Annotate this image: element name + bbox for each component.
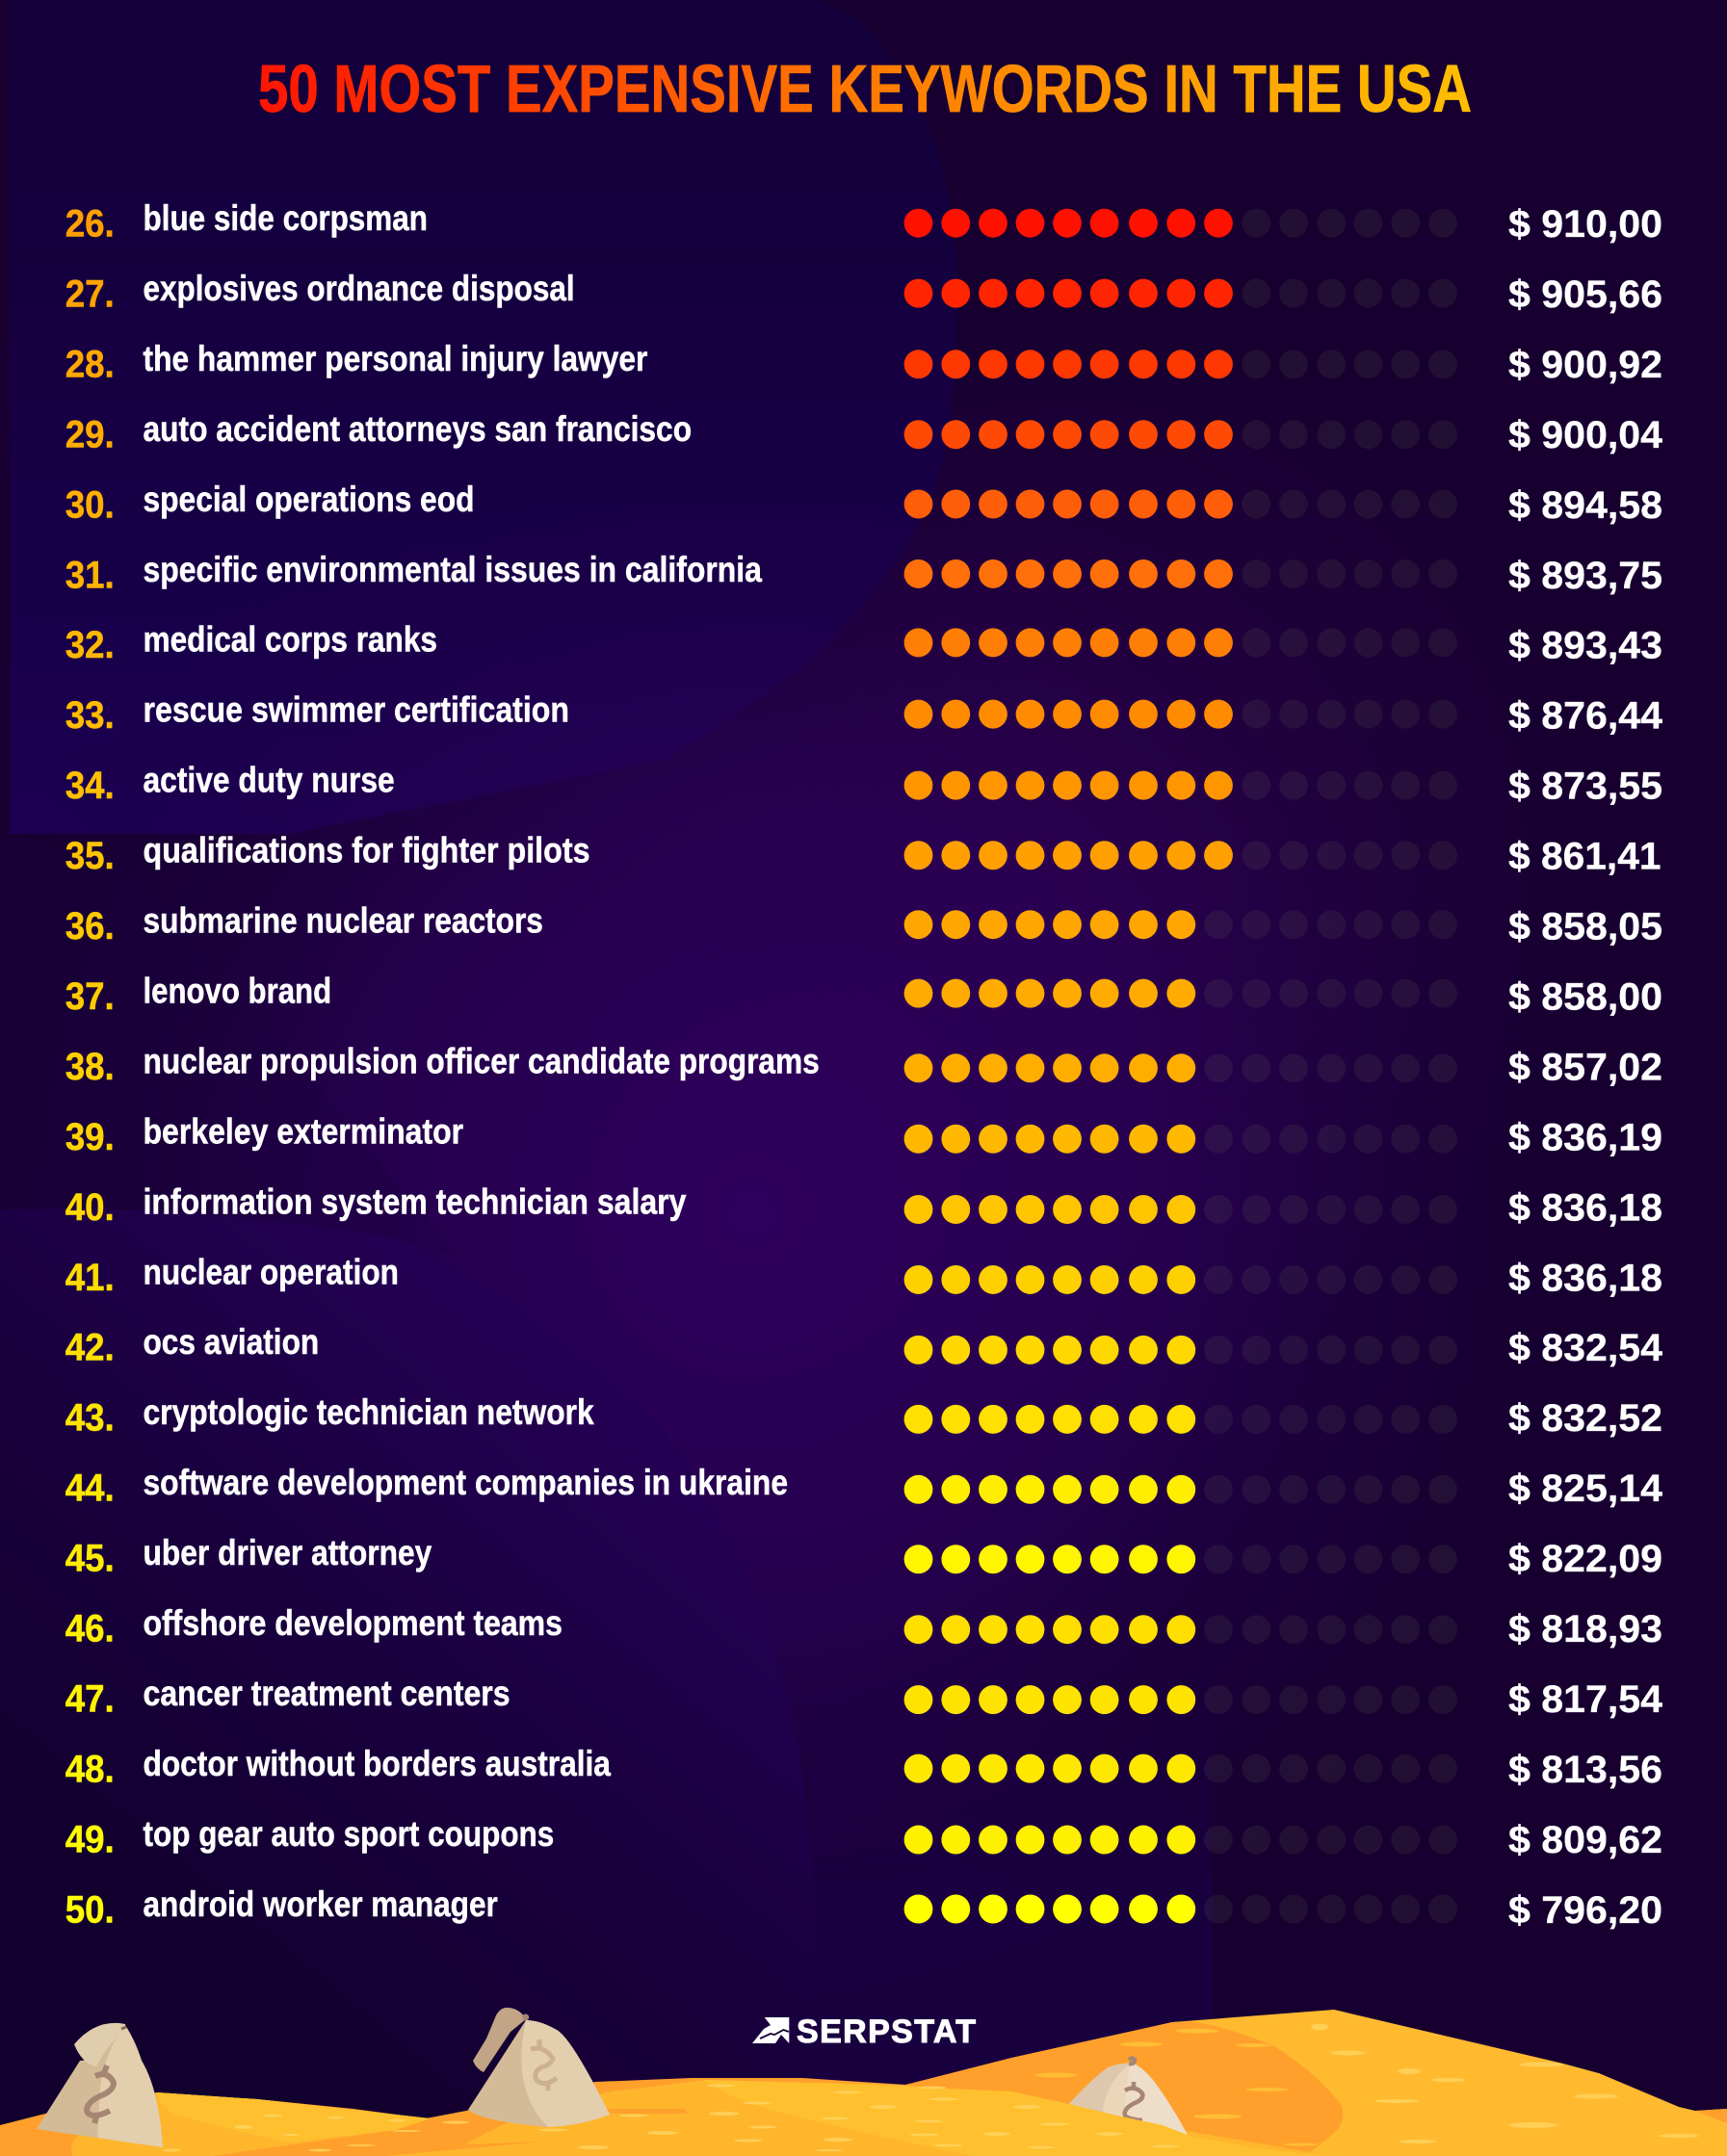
rank 44: 44. — [65, 1468, 115, 1510]
keyword 37: lenovo brand — [143, 970, 331, 1010]
keyword 50: android worker manager — [143, 1883, 498, 1924]
dots 50 — [904, 1895, 1457, 1924]
row 49 — [65, 1813, 1662, 1861]
row 31 — [65, 549, 1662, 597]
dots 31 — [904, 559, 1457, 588]
serpstat logo — [752, 2013, 976, 2050]
dots 37 — [904, 979, 1457, 1008]
dots 33 — [904, 700, 1457, 729]
money bag left — [37, 2023, 163, 2147]
rank 45: 45. — [65, 1538, 115, 1580]
keyword 26: blue side corpsman — [143, 197, 428, 238]
price 48: $ 813,56 — [1508, 1749, 1662, 1791]
rank 32: 32. — [65, 624, 115, 666]
bag 3 half buried — [1067, 2059, 1191, 2143]
keyword 46: offshore development teams — [143, 1602, 563, 1643]
money bag center — [468, 2008, 610, 2127]
keyword 36: submarine nuclear reactors — [143, 899, 543, 940]
rank 41: 41. — [65, 1257, 115, 1299]
row 34 — [65, 760, 1662, 808]
price 30: $ 894,58 — [1508, 484, 1662, 527]
keyword 45: uber driver attorney — [143, 1532, 432, 1572]
rank 50: 50. — [65, 1888, 115, 1931]
dots 28 — [904, 350, 1457, 378]
dots 26 — [904, 209, 1457, 238]
price 45: $ 822,09 — [1508, 1538, 1662, 1580]
keyword 42: ocs aviation — [143, 1321, 319, 1362]
keyword 34: active duty nurse — [143, 760, 395, 800]
row 46 — [65, 1602, 1662, 1650]
keyword 49: top gear auto sport coupons — [143, 1813, 554, 1854]
keyword 47: cancer treatment centers — [143, 1673, 510, 1713]
row 26 — [65, 197, 1662, 246]
rank 33: 33. — [65, 694, 115, 737]
row 29 — [65, 408, 1663, 456]
dots 36 — [904, 910, 1457, 939]
price 50: $ 796,20 — [1508, 1889, 1662, 1932]
orange hill shadow — [867, 2022, 1343, 2156]
keyword 28: the hammer personal injury lawyer — [143, 338, 648, 378]
logo wordmark: SERPSTAT — [797, 2013, 976, 2050]
price 35: $ 861,41 — [1508, 836, 1661, 878]
price 43: $ 832,52 — [1508, 1397, 1662, 1440]
dots 45 — [904, 1545, 1457, 1573]
keyword 41: nuclear operation — [143, 1251, 399, 1291]
row 39 — [65, 1110, 1662, 1158]
price 49: $ 809,62 — [1508, 1819, 1662, 1861]
dots 43 — [904, 1405, 1457, 1434]
dots 30 — [904, 489, 1457, 518]
keyword 33: rescue swimmer certification — [143, 689, 569, 730]
price 34: $ 873,55 — [1508, 766, 1662, 808]
dots 32 — [904, 628, 1457, 657]
rank 39: 39. — [65, 1116, 115, 1158]
center mid gold mound — [385, 2080, 1332, 2156]
dots 27 — [904, 279, 1457, 308]
price 31: $ 893,75 — [1508, 555, 1662, 597]
rank 29: 29. — [65, 413, 115, 455]
left light gold mound — [157, 2092, 431, 2143]
price 28: $ 900,92 — [1508, 344, 1662, 386]
row 33 — [65, 689, 1663, 738]
title: 50 MOST EXPENSIVE KEYWORDS IN THE USA — [258, 51, 1472, 126]
keyword 39: berkeley exterminator — [143, 1110, 463, 1151]
keyword ranking list — [65, 197, 1663, 1932]
dots 41 — [904, 1265, 1457, 1294]
price 41: $ 836,18 — [1508, 1257, 1662, 1299]
dots 35 — [904, 841, 1457, 870]
rank 34: 34. — [65, 765, 115, 807]
rank 38: 38. — [65, 1046, 115, 1088]
price 39: $ 836,19 — [1508, 1116, 1662, 1158]
rank 30: 30. — [65, 483, 115, 526]
price 27: $ 905,66 — [1508, 273, 1662, 316]
rank 35: 35. — [65, 835, 115, 877]
price 29: $ 900,04 — [1508, 414, 1663, 456]
orange bar — [607, 2109, 688, 2114]
dots 46 — [904, 1615, 1457, 1644]
rank 36: 36. — [65, 905, 115, 948]
row 44 — [65, 1462, 1663, 1510]
rank 40: 40. — [65, 1186, 115, 1229]
right edge orange sliver — [1695, 2109, 1727, 2123]
keyword 32: medical corps ranks — [143, 619, 437, 660]
row 42 — [65, 1321, 1663, 1369]
gold ground — [0, 2010, 1727, 2156]
rank 37: 37. — [65, 975, 115, 1018]
orange base ground — [0, 2078, 963, 2156]
right hill — [867, 2010, 1727, 2156]
keyword 44: software development companies in ukraine — [143, 1462, 788, 1502]
price 37: $ 858,00 — [1508, 975, 1662, 1018]
price 33: $ 876,44 — [1508, 695, 1663, 738]
price 42: $ 832,54 — [1508, 1327, 1663, 1369]
keyword 35: qualifications for fighter pilots — [143, 830, 589, 870]
dots 34 — [904, 771, 1457, 800]
keyword 48: doctor without borders australia — [143, 1743, 612, 1783]
rank 42: 42. — [65, 1327, 115, 1369]
row 40 — [65, 1181, 1662, 1229]
rank 27: 27. — [65, 273, 115, 315]
row 27 — [65, 268, 1662, 316]
price 36: $ 858,05 — [1508, 905, 1662, 948]
price 38: $ 857,02 — [1508, 1046, 1662, 1088]
keyword 38: nuclear propulsion officer candidate programs — [143, 1040, 820, 1080]
row 43 — [65, 1391, 1662, 1440]
row 48 — [65, 1743, 1662, 1791]
left mid gold mound — [71, 2092, 431, 2156]
row 35 — [65, 830, 1662, 878]
keyword 40: information system technician salary — [143, 1181, 687, 1221]
rank 28: 28. — [65, 343, 115, 385]
dots 44 — [904, 1475, 1457, 1504]
row 37 — [65, 970, 1662, 1018]
dots 48 — [904, 1754, 1457, 1783]
rank 31: 31. — [65, 554, 115, 596]
dots 29 — [904, 420, 1457, 449]
row 50 — [65, 1883, 1662, 1932]
rank 43: 43. — [65, 1397, 115, 1440]
price 32: $ 893,43 — [1508, 625, 1662, 667]
row 30 — [65, 479, 1662, 527]
row 47 — [65, 1673, 1663, 1721]
gold flecks on gold — [163, 2024, 1699, 2151]
dots 39 — [904, 1125, 1457, 1154]
keyword 43: cryptologic technician network — [143, 1391, 594, 1432]
price 44: $ 825,14 — [1508, 1468, 1663, 1510]
rank 48: 48. — [65, 1748, 115, 1790]
row 28 — [65, 338, 1662, 386]
dots 40 — [904, 1195, 1457, 1224]
keyword 30: special operations eod — [143, 479, 474, 519]
row 38 — [65, 1040, 1662, 1088]
price 40: $ 836,18 — [1508, 1186, 1662, 1229]
keyword 31: specific environmental issues in california — [143, 549, 763, 589]
dots 42 — [904, 1336, 1457, 1364]
row 36 — [65, 899, 1662, 948]
row 45 — [65, 1532, 1662, 1580]
rank 26: 26. — [65, 202, 115, 245]
keyword 27: explosives ordnance disposal — [143, 268, 575, 308]
gold flecks on orange — [1034, 2028, 1318, 2145]
price 46: $ 818,93 — [1508, 1608, 1662, 1650]
price 47: $ 817,54 — [1508, 1678, 1663, 1721]
price 26: $ 910,00 — [1508, 203, 1662, 246]
dots 49 — [904, 1826, 1457, 1855]
row 41 — [65, 1251, 1662, 1299]
foreground hill — [704, 2080, 1332, 2156]
keyword 29: auto accident attorneys san francisco — [143, 408, 692, 449]
dots 47 — [904, 1685, 1457, 1714]
rank 46: 46. — [65, 1608, 115, 1650]
dots 38 — [904, 1053, 1457, 1082]
rank 47: 47. — [65, 1677, 115, 1720]
row 32 — [65, 619, 1662, 667]
rank 49: 49. — [65, 1818, 115, 1860]
logo icon — [752, 2017, 789, 2043]
